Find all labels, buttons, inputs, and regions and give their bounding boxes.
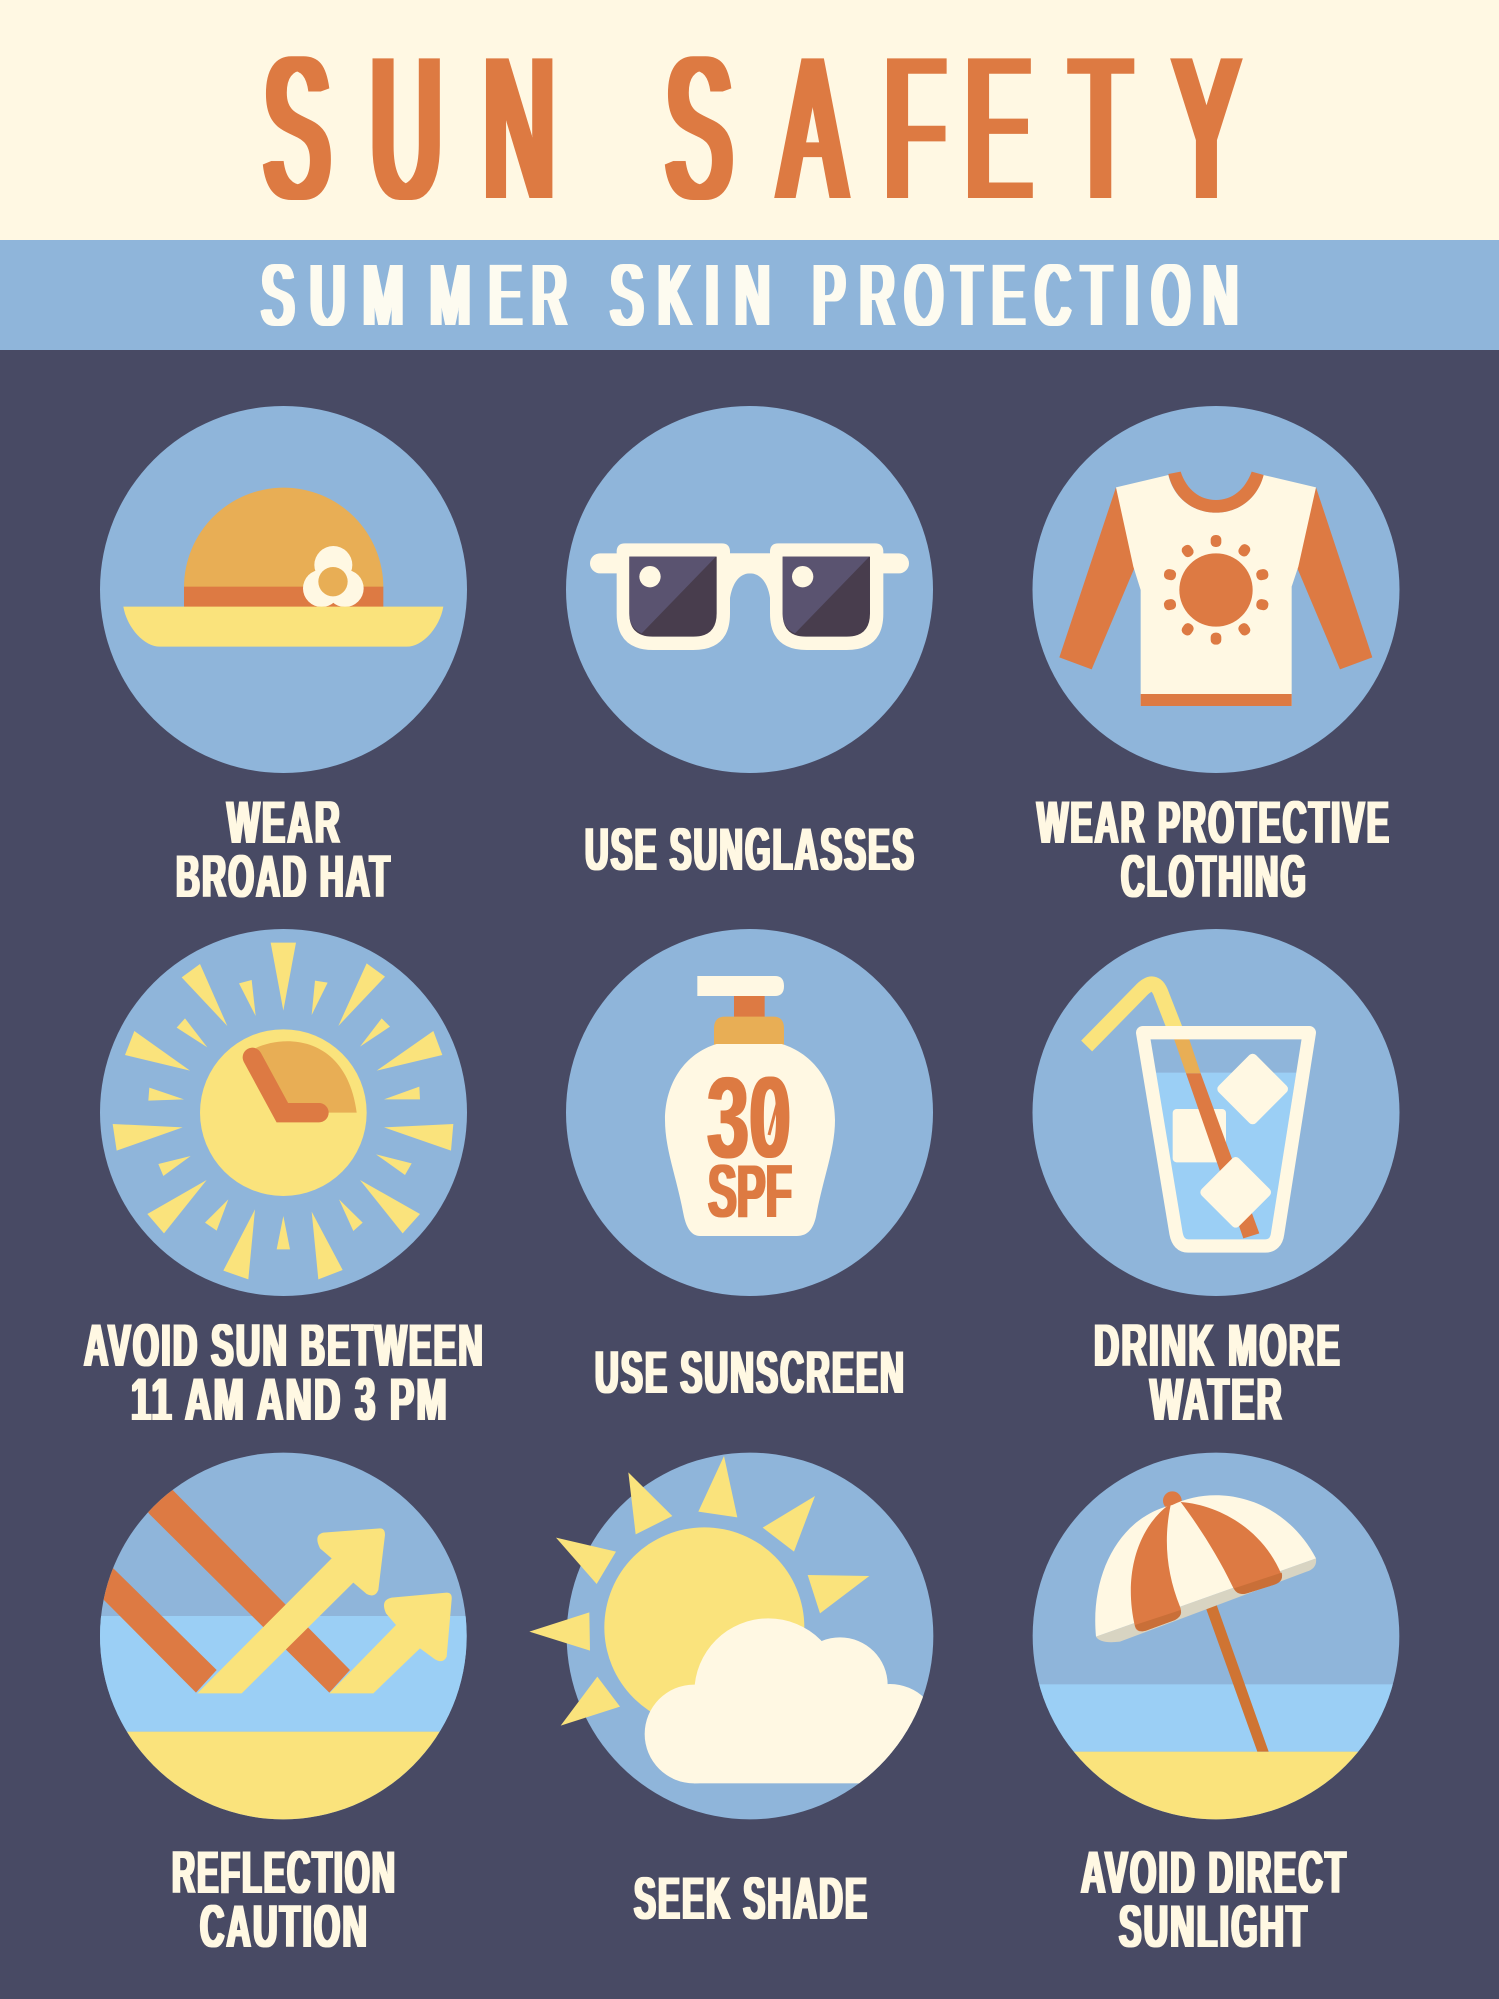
subtitle: SUMMER SKIN PROTECTION: [262, 246, 1238, 344]
circle background: [100, 929, 467, 1296]
label: SUNLIGHT: [1119, 1893, 1309, 1960]
icon: sunglasses: [590, 543, 909, 650]
label: WEAR: [227, 789, 342, 856]
icon: sun clock: [113, 943, 453, 1279]
label: CAUTION: [200, 1893, 369, 1960]
header band: [0, 0, 1499, 240]
label: BROAD HAT: [176, 843, 392, 910]
label: AVOID SUN BETWEEN: [84, 1312, 485, 1379]
label: CLOTHING: [1121, 843, 1308, 910]
label: WATER: [1150, 1366, 1284, 1433]
circle background: [566, 929, 933, 1296]
circle background: [566, 406, 933, 773]
icon: glass of water: [1087, 984, 1309, 1246]
circle background: [1032, 929, 1400, 1296]
panel: avoid direct sunlight: [1032, 1452, 1400, 1948]
icon: sunscreen bottle: [665, 976, 835, 1236]
icon: sweater: [1059, 472, 1372, 706]
label: 11 AM AND 3 PM: [131, 1366, 449, 1433]
icon: hat: [123, 488, 443, 647]
panel: use sunglasses: [566, 406, 933, 883]
icon: sun behind cloud: [529, 1453, 939, 1819]
icon: reflected rays: [100, 1452, 467, 1820]
panel: wear protective clothing: [1032, 406, 1400, 910]
label: USE SUNGLASSES: [585, 816, 916, 883]
panel: wear broad hat: [100, 406, 467, 910]
panel: use sunscreen: [566, 929, 933, 1406]
icon: sunscreen bottle: 30: [707, 1054, 791, 1182]
label: USE SUNSCREEN: [595, 1339, 906, 1406]
subtitle band: [0, 240, 1499, 350]
icon: sunscreen bottle: SPF: [708, 1149, 792, 1233]
circle background: [100, 406, 467, 773]
panel: seek shade: [529, 1453, 939, 1932]
title: SUN SAFETY: [264, 14, 1239, 241]
panel: reflection caution: [100, 1452, 467, 1948]
label: SEEK SHADE: [634, 1865, 869, 1932]
label: REFLECTION: [172, 1839, 397, 1906]
panel: drink more water: [1032, 929, 1400, 1433]
circle background: [1032, 406, 1400, 773]
icon: beach umbrella: [1032, 1452, 1400, 1820]
panel: avoid sun between 11 and 3: [84, 929, 485, 1433]
